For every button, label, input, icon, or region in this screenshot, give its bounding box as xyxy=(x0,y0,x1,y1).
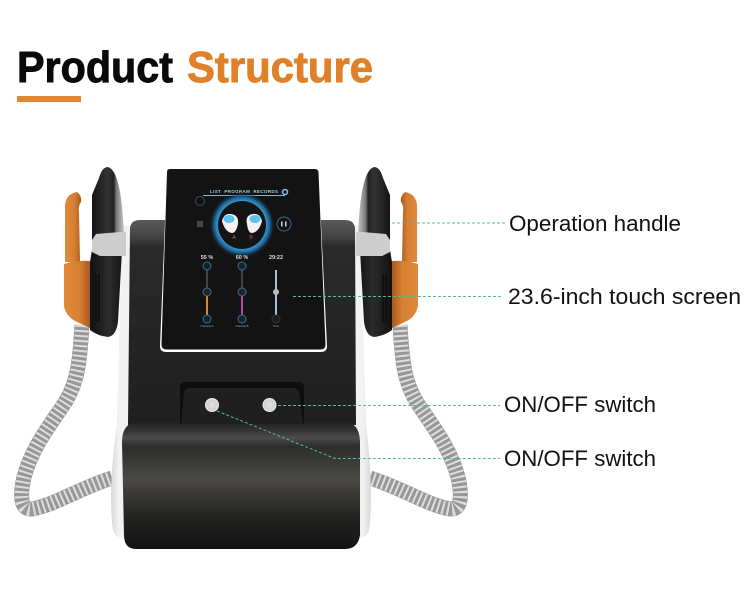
label: switch 2: ON/OFF switch xyxy=(504,446,656,471)
left cable xyxy=(22,325,112,509)
touch screen xyxy=(160,169,327,352)
white band xyxy=(92,232,126,256)
label: touch screen: 23.6-inch touch screen xyxy=(508,284,741,309)
touch screen: Intensity B xyxy=(235,324,249,328)
screen menu: LIST PROGRAM RECORDS xyxy=(210,189,278,194)
heading: Product: Product xyxy=(17,43,173,92)
black lower body xyxy=(90,250,122,337)
glowing ring with applicators: B xyxy=(249,235,253,241)
machine body xyxy=(111,220,371,549)
label: switch 1: ON/OFF switch xyxy=(504,392,656,417)
touch screen: 60 % xyxy=(236,255,248,261)
sliders xyxy=(203,262,280,323)
grip slots xyxy=(96,274,99,322)
left handle xyxy=(64,167,126,337)
right cable xyxy=(370,325,460,509)
label: operation handle: Operation handle xyxy=(509,211,681,236)
lower base xyxy=(122,421,360,549)
touch screen: 29:22 xyxy=(269,255,283,261)
button 2 xyxy=(262,398,276,412)
title underline xyxy=(17,96,81,102)
upper column xyxy=(128,220,356,425)
orange grip bar xyxy=(65,192,81,262)
screen bezel xyxy=(160,169,327,352)
slider captions: Intensity A xyxy=(201,324,214,328)
glowing ring with applicators xyxy=(209,192,275,258)
title xyxy=(17,43,373,102)
orange body xyxy=(64,261,90,328)
heading: Structure: Structure xyxy=(187,43,373,92)
switch panel xyxy=(180,382,304,424)
right handle xyxy=(356,167,418,337)
touch screen: Time xyxy=(273,324,279,328)
callout lines xyxy=(217,223,505,458)
readouts: 55 % xyxy=(201,255,213,261)
white side shell xyxy=(111,225,371,538)
glowing ring with applicators: A xyxy=(232,235,236,241)
button 1 xyxy=(205,398,219,412)
black upper body xyxy=(92,167,124,240)
